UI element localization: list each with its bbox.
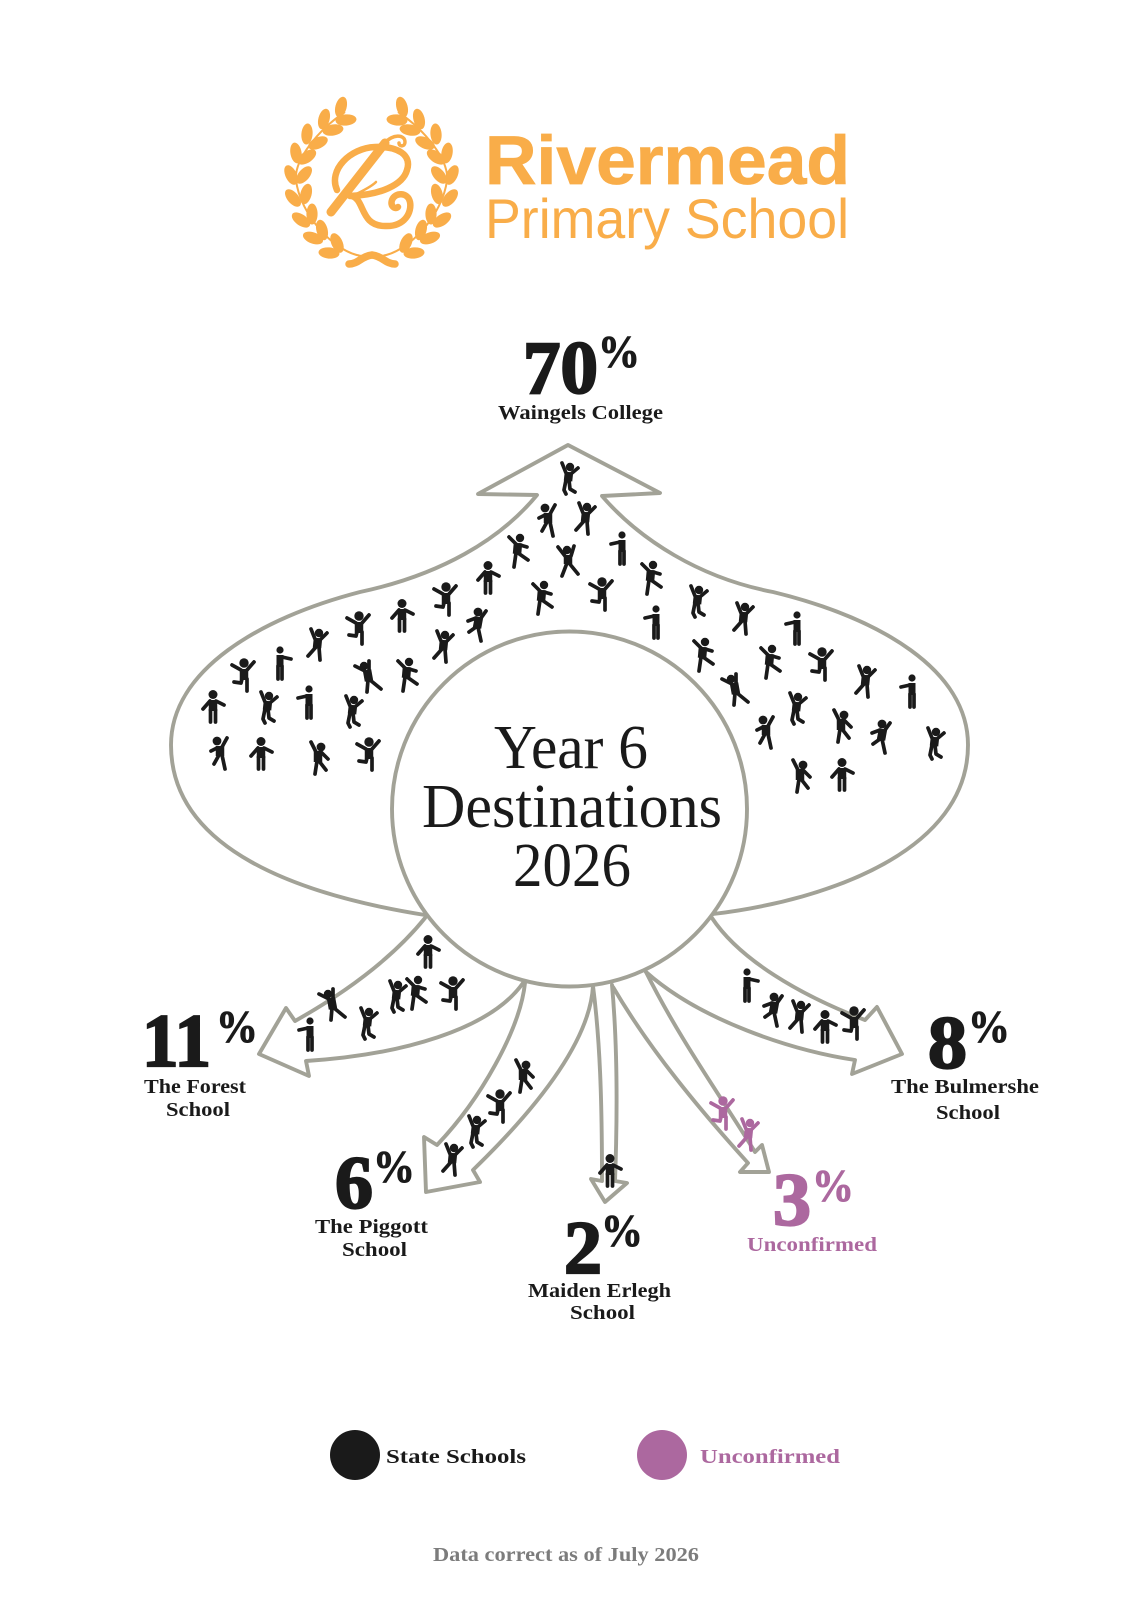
stat: 6% The Piggott School: School bbox=[342, 1240, 408, 1261]
stat: 11% The Forest School: % bbox=[216, 1002, 258, 1052]
stat: 8% The Bulmershe School bbox=[891, 1002, 1039, 1124]
stat: 2% Maiden Erlegh School: 2 bbox=[564, 1207, 602, 1290]
stat: 3% Unconfirmed: Unconfirmed bbox=[747, 1235, 877, 1256]
people: The Piggott School bbox=[443, 1060, 533, 1175]
stat: 8% The Bulmershe School: School bbox=[936, 1103, 1001, 1124]
arrow: Forest School bbox=[259, 918, 523, 1076]
school name bbox=[485, 122, 850, 250]
arrow: Waingels College main shape bbox=[171, 445, 968, 915]
stat: 11% The Forest School: 11 bbox=[142, 1000, 211, 1083]
legend: State Schools: State Schools bbox=[386, 1447, 527, 1468]
icon: laurel wreath bbox=[281, 95, 462, 264]
stat: 11% The Forest School: The Forest bbox=[144, 1077, 247, 1098]
arrow: Maiden Erlegh School bbox=[591, 985, 627, 1202]
stat: 6% The Piggott School: % bbox=[373, 1142, 415, 1192]
title: Year 6 Destinations 2026 bbox=[422, 714, 722, 900]
icon: RP monogram bbox=[331, 136, 410, 226]
stat: 8% The Bulmershe School: The Bulmershe bbox=[891, 1077, 1039, 1098]
people: Unconfirmed bbox=[711, 1096, 758, 1150]
legend: Unconfirmed: Unconfirmed bbox=[700, 1447, 840, 1468]
legend: Unconfirmed bbox=[637, 1430, 840, 1480]
arrow: Bulmershe School bbox=[646, 918, 902, 1074]
stat: 6% The Piggott School: The Piggott bbox=[315, 1217, 429, 1238]
arrow: Unconfirmed bbox=[613, 972, 769, 1172]
stat: 8% The Bulmershe School: 8 bbox=[928, 1002, 967, 1085]
legend: State Schools bbox=[330, 1430, 527, 1480]
school name: Primary School bbox=[485, 187, 849, 250]
arrow: Piggott School bbox=[424, 983, 593, 1192]
central circle bbox=[392, 632, 747, 986]
stat: 2% Maiden Erlegh School: School bbox=[570, 1303, 636, 1324]
people: Waingels College bbox=[203, 463, 944, 792]
title: Year 6 Destinations 2026: 2026 bbox=[513, 832, 631, 900]
stat: 70% Waingels College: 70 bbox=[523, 327, 598, 410]
stat: 2% Maiden Erlegh School: % bbox=[601, 1206, 643, 1256]
stat: 11% The Forest School bbox=[142, 1000, 258, 1121]
people: The Forest School bbox=[299, 935, 463, 1050]
stat: 70% Waingels College: Waingels College bbox=[498, 403, 663, 424]
school name: Rivermead bbox=[485, 122, 850, 199]
people: Maiden Erlegh School bbox=[600, 1154, 621, 1186]
stat: 8% The Bulmershe School: % bbox=[968, 1002, 1010, 1052]
stat: 2% Maiden Erlegh School: Maiden Erlegh bbox=[528, 1281, 671, 1302]
stat: 3% Unconfirmed: % bbox=[812, 1161, 854, 1211]
stat: 2% Maiden Erlegh School bbox=[528, 1206, 671, 1324]
stat: 70% Waingels College bbox=[498, 327, 663, 424]
logo: Rivermead Primary School bbox=[281, 95, 850, 264]
stat: 6% The Piggott School bbox=[315, 1142, 429, 1261]
people: The Bulmershe School bbox=[743, 968, 864, 1042]
stat: 6% The Piggott School: 6 bbox=[335, 1142, 373, 1225]
footnote: Data correct as of July 2026 bbox=[433, 1544, 699, 1566]
title: Year 6 Destinations 2026: Destinations bbox=[422, 773, 722, 841]
stat: 3% Unconfirmed: 3 bbox=[773, 1159, 811, 1242]
stat: 3% Unconfirmed bbox=[747, 1159, 877, 1256]
stat: 11% The Forest School: School bbox=[166, 1100, 231, 1121]
stat: 70% Waingels College: % bbox=[598, 327, 640, 377]
title: Year 6 Destinations 2026: Year 6 bbox=[494, 714, 648, 782]
